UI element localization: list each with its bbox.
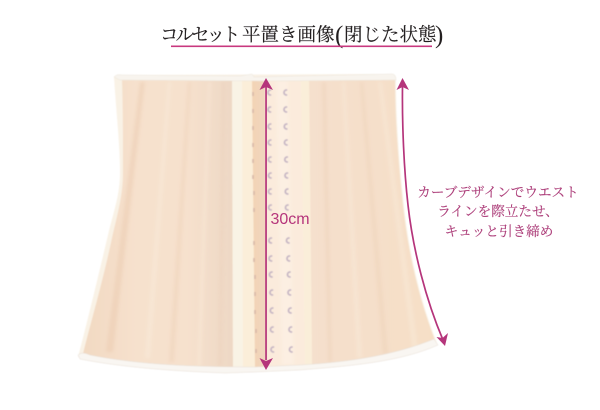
hook eyes [268,90,292,352]
side caption [417,185,579,239]
title: 閉じた状態 [344,25,437,46]
side caption: カーブデザインでウエスト [417,185,579,200]
inner shaded strip [252,78,267,369]
curved side arrow [396,78,448,346]
side caption: ラインを際立たせ、 [437,204,559,219]
side caption: キュッと引き締め [445,223,553,239]
title [160,22,443,49]
boning stripes [106,82,418,366]
title parentheses [335,22,443,49]
bottom binding [78,339,438,373]
hook ticks on flap edge [253,92,256,353]
height arrow: 30cm [260,78,273,370]
title parentheses: ) [435,22,443,49]
left fastening flap [232,78,255,369]
top binding [114,74,396,81]
title parentheses: ( [335,22,343,49]
corset garment [78,74,438,373]
title underline [171,46,432,47]
right body panel [305,80,436,365]
hook panel [265,78,312,367]
measurement label: 30cm [270,211,310,228]
title: コルセット [160,26,238,46]
title: 平置き画像 [242,25,335,46]
left body panel [83,80,233,369]
corset outer silhouette [78,74,437,373]
